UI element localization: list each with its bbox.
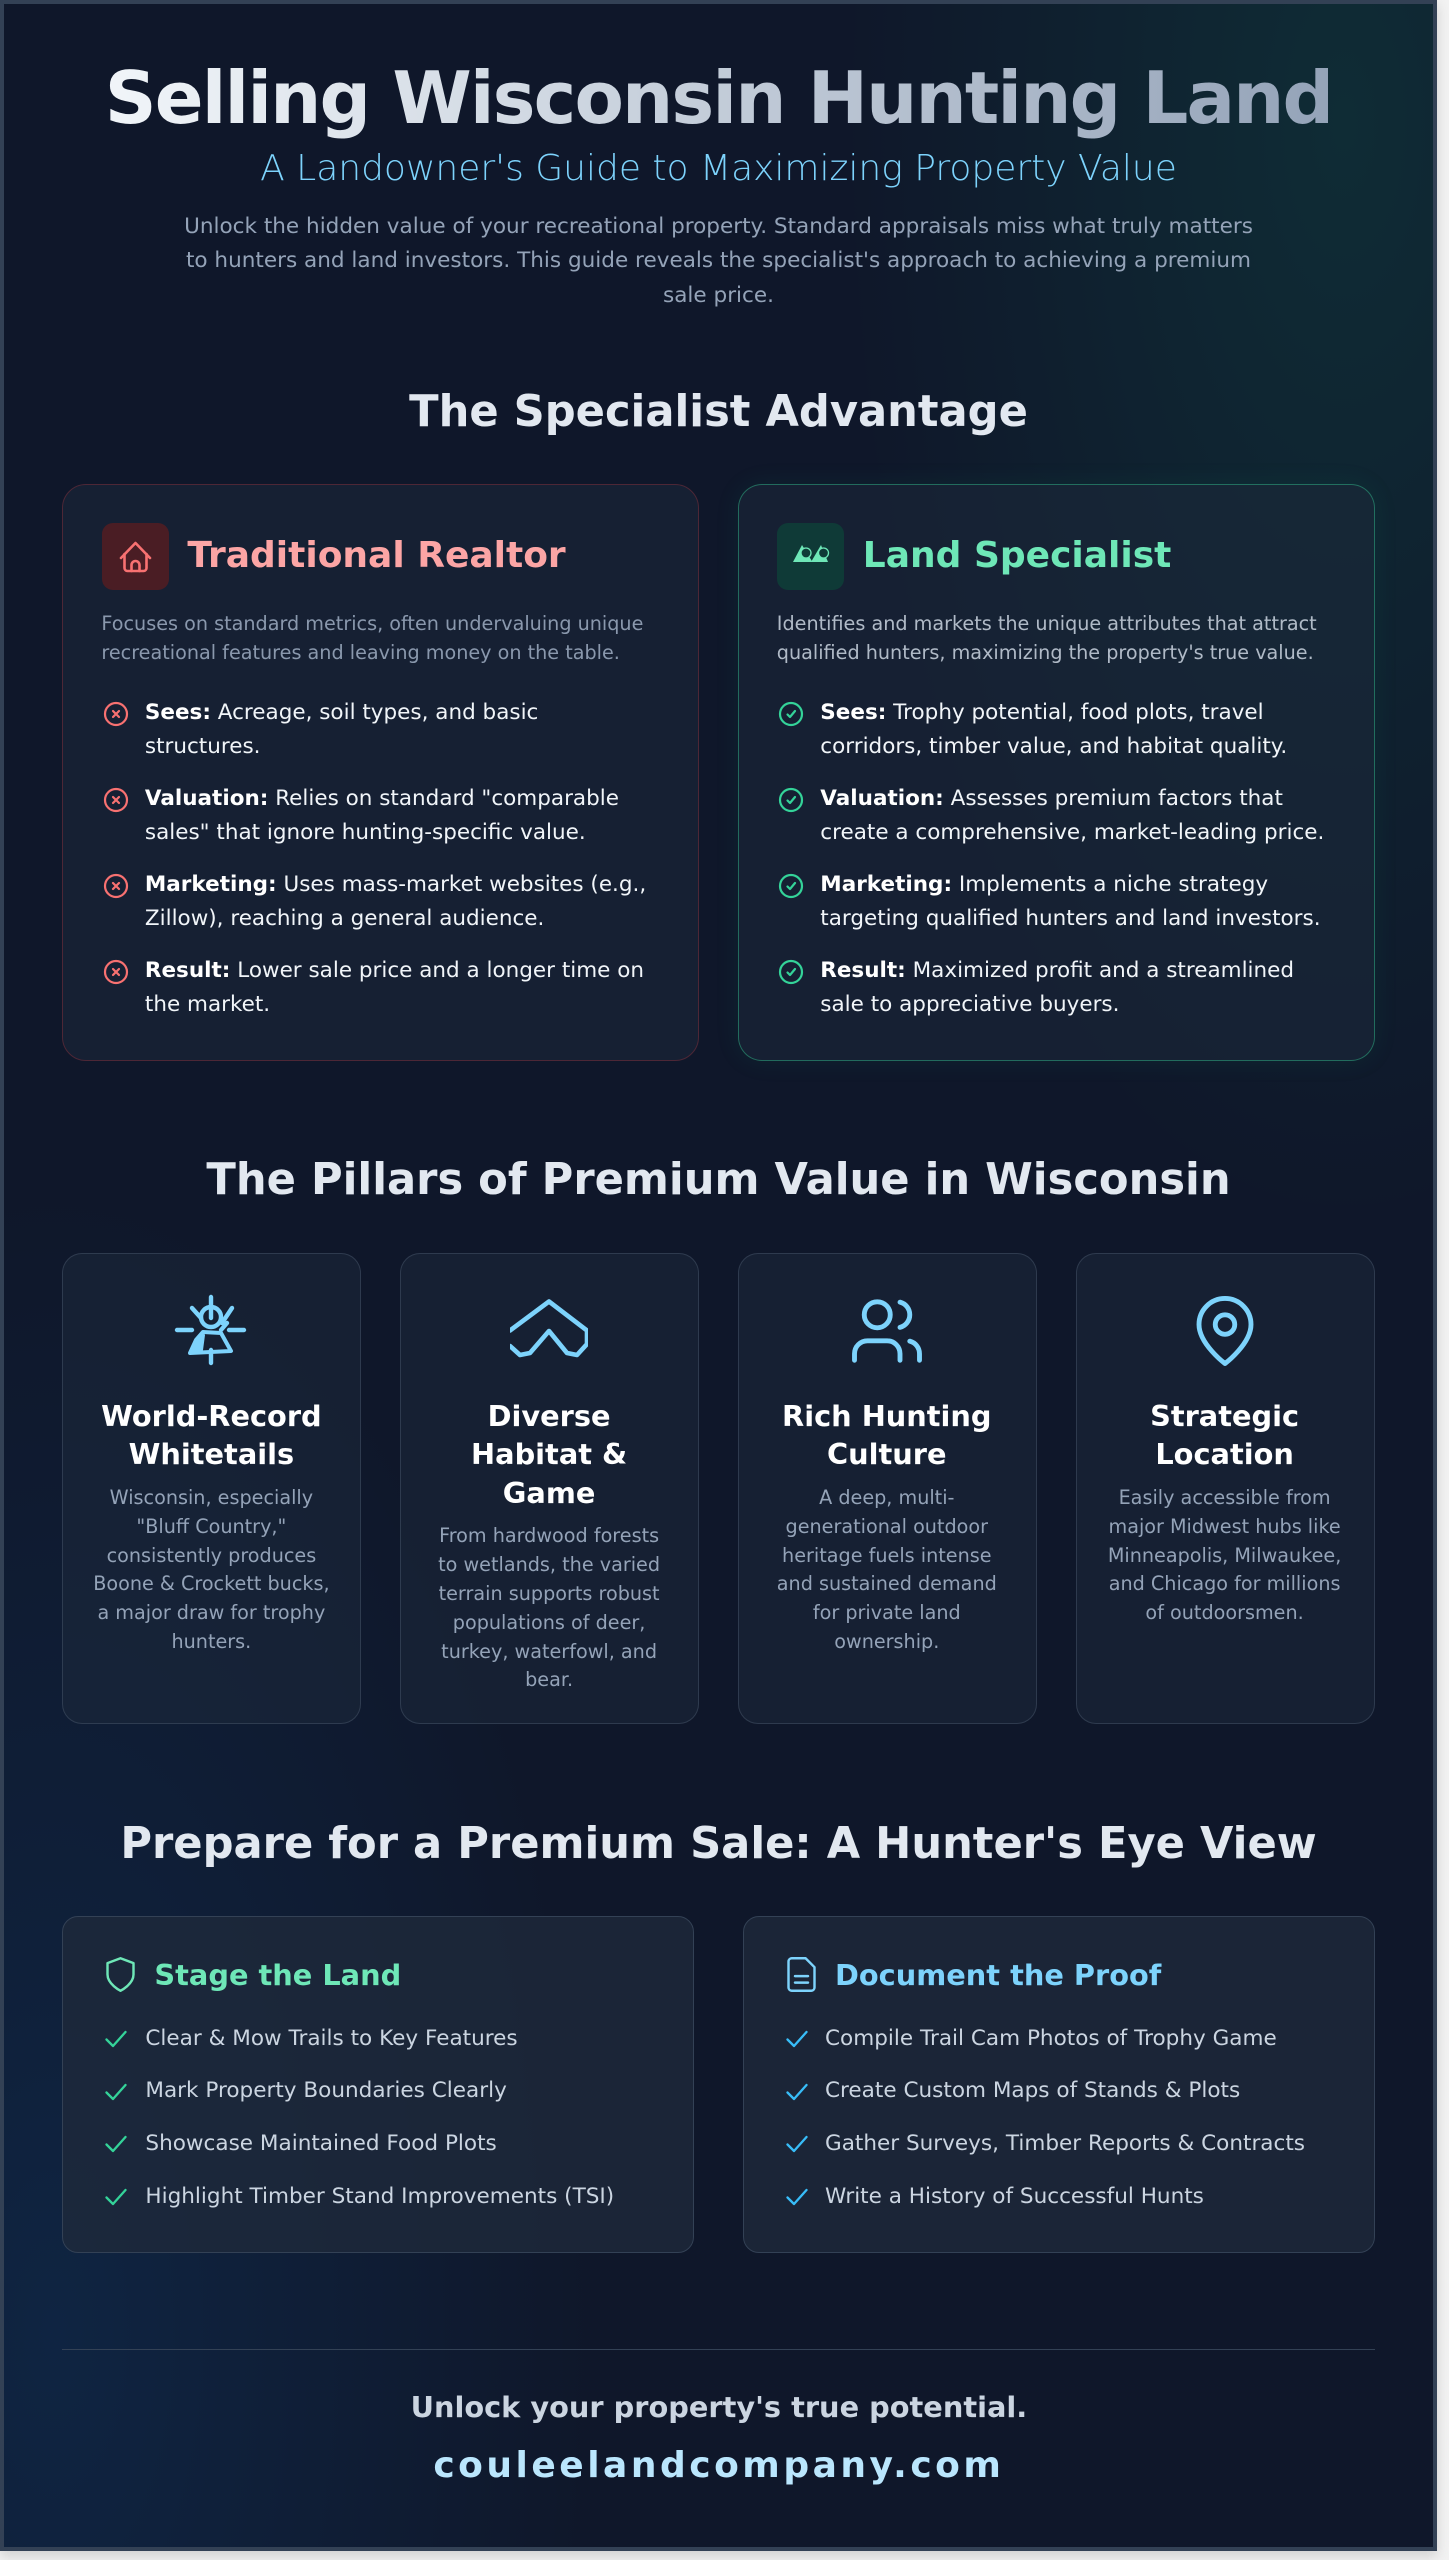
checklist <box>744 2018 1373 2238</box>
pillar description: ownership. <box>834 1630 939 1653</box>
icon: check <box>786 2188 808 2206</box>
pillar heading <box>471 1399 627 1510</box>
text <box>145 700 538 759</box>
pillar heading <box>782 1399 992 1471</box>
heading: Document the Proof <box>835 1958 1161 1992</box>
pillar description: a major draw for trophy <box>97 1601 325 1624</box>
text <box>820 786 1324 845</box>
heading: pillars of premium value: The Pillars of Premium Value in Wisconsin <box>206 1155 1231 1205</box>
checklist <box>63 2018 692 2238</box>
pillar description: bear. <box>525 1668 573 1691</box>
pillar heading <box>1150 1399 1299 1471</box>
list item: valuation <box>104 786 619 845</box>
pillar heading: Whitetails <box>129 1437 294 1471</box>
pillar description: major Midwest hubs like <box>1108 1515 1341 1538</box>
text: sales" that ignore hunting-specific value. <box>145 820 586 845</box>
panel: document the proof <box>743 1916 1375 2253</box>
text: Sees: Acreage, soil types, and basic <box>145 700 538 725</box>
list item: result <box>778 958 1294 1017</box>
list item: sees <box>104 700 538 759</box>
pillar heading: Habitat & <box>471 1437 627 1471</box>
text: Valuation: Assesses premium factors that <box>820 786 1283 811</box>
item: Compile Trail Cam Photos of Trophy Game <box>825 2026 1277 2051</box>
icon: shield <box>101 1955 140 1994</box>
subtitle: A Landowner's Guide to Maximizing Property Value <box>260 148 1177 189</box>
card description: Identifies and markets the unique attributes that attract <box>777 612 1317 635</box>
pillar description: Easily accessible from <box>1119 1486 1331 1509</box>
pillar description: populations of deer, <box>453 1611 645 1634</box>
intro text: sale price. <box>663 283 774 308</box>
pillar description: generational outdoor <box>786 1515 988 1538</box>
icon: x circle <box>104 702 128 726</box>
text <box>145 958 644 1017</box>
text: Result: Lower sale price and a longer time on <box>145 958 644 983</box>
icon: deer in crosshair <box>174 1294 246 1366</box>
text: Result: Maximized profit and a streamlined <box>820 958 1294 983</box>
item: Mark Property Boundaries Clearly <box>145 2078 507 2103</box>
panel: strategic location <box>1076 1252 1375 1724</box>
text: Valuation: Relies on standard "comparable <box>145 786 619 811</box>
heading: prepare for a premium sale: Prepare for a Premium Sale: A Hunter's Eye View <box>120 1818 1317 1868</box>
pillar description <box>93 1486 330 1653</box>
list item: valuation <box>778 786 1324 845</box>
pillar heading: World-Record <box>101 1399 322 1433</box>
icon: house <box>102 523 169 590</box>
pillar description: Boone & Crockett bucks, <box>93 1572 330 1595</box>
text: the market. <box>145 992 270 1017</box>
text <box>145 872 646 931</box>
text: Marketing: Implements a niche strategy <box>820 872 1268 897</box>
icon: mountains <box>777 523 844 590</box>
icon: mountain chevron <box>510 1299 588 1358</box>
pillar description: terrain supports robust <box>439 1582 660 1605</box>
item: Create Custom Maps of Stands & Plots <box>825 2078 1240 2103</box>
panel: land specialist <box>738 484 1375 1060</box>
pillar description: hunters. <box>171 1630 251 1653</box>
text <box>145 786 619 845</box>
item: Showcase Maintained Food Plots <box>145 2131 497 2156</box>
list item: marketing <box>778 872 1321 931</box>
pillar description: Minneapolis, Milwaukee, <box>1108 1544 1341 1567</box>
website: couleelandcompany.com <box>433 2444 1004 2486</box>
card description <box>777 612 1317 664</box>
icon: check circle <box>778 874 804 898</box>
pillar description: consistently produces <box>107 1544 316 1567</box>
heading: the specialist advantage: The Specialist Advantage <box>409 386 1028 436</box>
footer <box>62 2349 1375 2500</box>
text: Sees: Trophy potential, food plots, travel <box>820 700 1264 725</box>
title: Selling Wisconsin Hunting Land <box>105 56 1332 140</box>
panel: stage the land <box>62 1916 694 2253</box>
heading: Stage the Land <box>154 1958 401 1992</box>
icon: check <box>105 2083 127 2101</box>
pillar description <box>1077 1484 1373 1628</box>
panel: world-record whitetails <box>62 1252 361 1724</box>
list item: marketing <box>104 872 646 931</box>
icon: map pin <box>1196 1296 1254 1366</box>
text: create a comprehensive, market-leading price. <box>820 820 1324 845</box>
icon: check <box>786 2083 808 2101</box>
icon: check circle <box>778 788 804 812</box>
intro text: to hunters and land investors. This guide reveals the specialist's approach to achieving a premium <box>186 248 1251 273</box>
icon: check circle <box>778 960 804 984</box>
icon: check <box>105 2030 127 2048</box>
pillar description: and Chicago for millions <box>1109 1572 1340 1595</box>
item: Clear & Mow Trails to Key Features <box>145 2026 518 2051</box>
pillar description: A deep, multi- <box>819 1486 954 1509</box>
pillar description <box>438 1524 660 1691</box>
pillar heading: Strategic <box>1150 1399 1299 1433</box>
pillar heading: Diverse <box>488 1399 611 1433</box>
icon: check circle <box>778 702 804 726</box>
header <box>105 56 1332 308</box>
text: Zillow), reaching a general audience. <box>145 906 544 931</box>
pillar description: turkey, waterfowl, and <box>441 1640 657 1663</box>
pillar description: and sustained demand <box>777 1572 997 1595</box>
list item: result <box>104 958 644 1017</box>
text: targeting qualified hunters and land investors. <box>820 906 1321 931</box>
panel: traditional realtor <box>62 484 699 1060</box>
card description <box>101 612 643 664</box>
text: sale to appreciative buyers. <box>820 992 1119 1017</box>
list item: sees <box>778 700 1287 759</box>
pillar description: for private land <box>813 1601 961 1624</box>
card title: Traditional Realtor <box>187 535 566 576</box>
text: structures. <box>145 734 260 759</box>
icon: check <box>105 2135 127 2153</box>
pillar heading <box>101 1399 322 1471</box>
pillar description: Wisconsin, especially <box>110 1486 313 1509</box>
tagline: Unlock your property's true potential. <box>411 2390 1027 2424</box>
pillar heading: Location <box>1155 1437 1294 1471</box>
icon: check <box>105 2188 127 2206</box>
pillar heading: Game <box>503 1476 595 1510</box>
pillar description: to wetlands, the varied <box>438 1553 660 1576</box>
pillar description: heritage fuels intense <box>782 1544 992 1567</box>
icon: x circle <box>104 874 128 898</box>
icon: x circle <box>104 788 128 812</box>
pillar description: of outdoorsmen. <box>1145 1601 1304 1624</box>
item: Highlight Timber Stand Improvements (TSI) <box>145 2184 614 2209</box>
pillar description <box>777 1486 997 1653</box>
pillar description: "Bluff Country," <box>136 1515 286 1538</box>
icon: people <box>852 1299 922 1363</box>
text <box>820 872 1321 931</box>
text: corridors, timber value, and habitat quality. <box>820 734 1287 759</box>
text: Marketing: Uses mass-market websites (e.g., <box>145 872 646 897</box>
pillar heading: Culture <box>827 1437 947 1471</box>
card description: qualified hunters, maximizing the property's true value. <box>777 641 1314 664</box>
icon: document <box>782 1954 821 1994</box>
item: Gather Surveys, Timber Reports & Contracts <box>825 2131 1305 2156</box>
text <box>820 958 1294 1017</box>
card description: recreational features and leaving money on the table. <box>101 641 620 664</box>
card description: Focuses on standard metrics, often undervaluing unique <box>101 612 643 635</box>
intro text: Unlock the hidden value of your recreational property. Standard appraisals miss what truly matters <box>184 214 1253 239</box>
pillar heading: Rich Hunting <box>782 1399 992 1433</box>
panel: rich hunting culture <box>738 1252 1037 1724</box>
intro text <box>184 214 1253 308</box>
icon: x circle <box>104 960 128 984</box>
pillar description: From hardwood forests <box>439 1524 659 1547</box>
panel: diverse habitat and game <box>400 1252 699 1724</box>
item: Write a History of Successful Hunts <box>825 2184 1204 2209</box>
icon: check <box>786 2030 808 2048</box>
text <box>820 700 1287 759</box>
icon: check <box>786 2135 808 2153</box>
card title: Land Specialist <box>863 535 1171 576</box>
